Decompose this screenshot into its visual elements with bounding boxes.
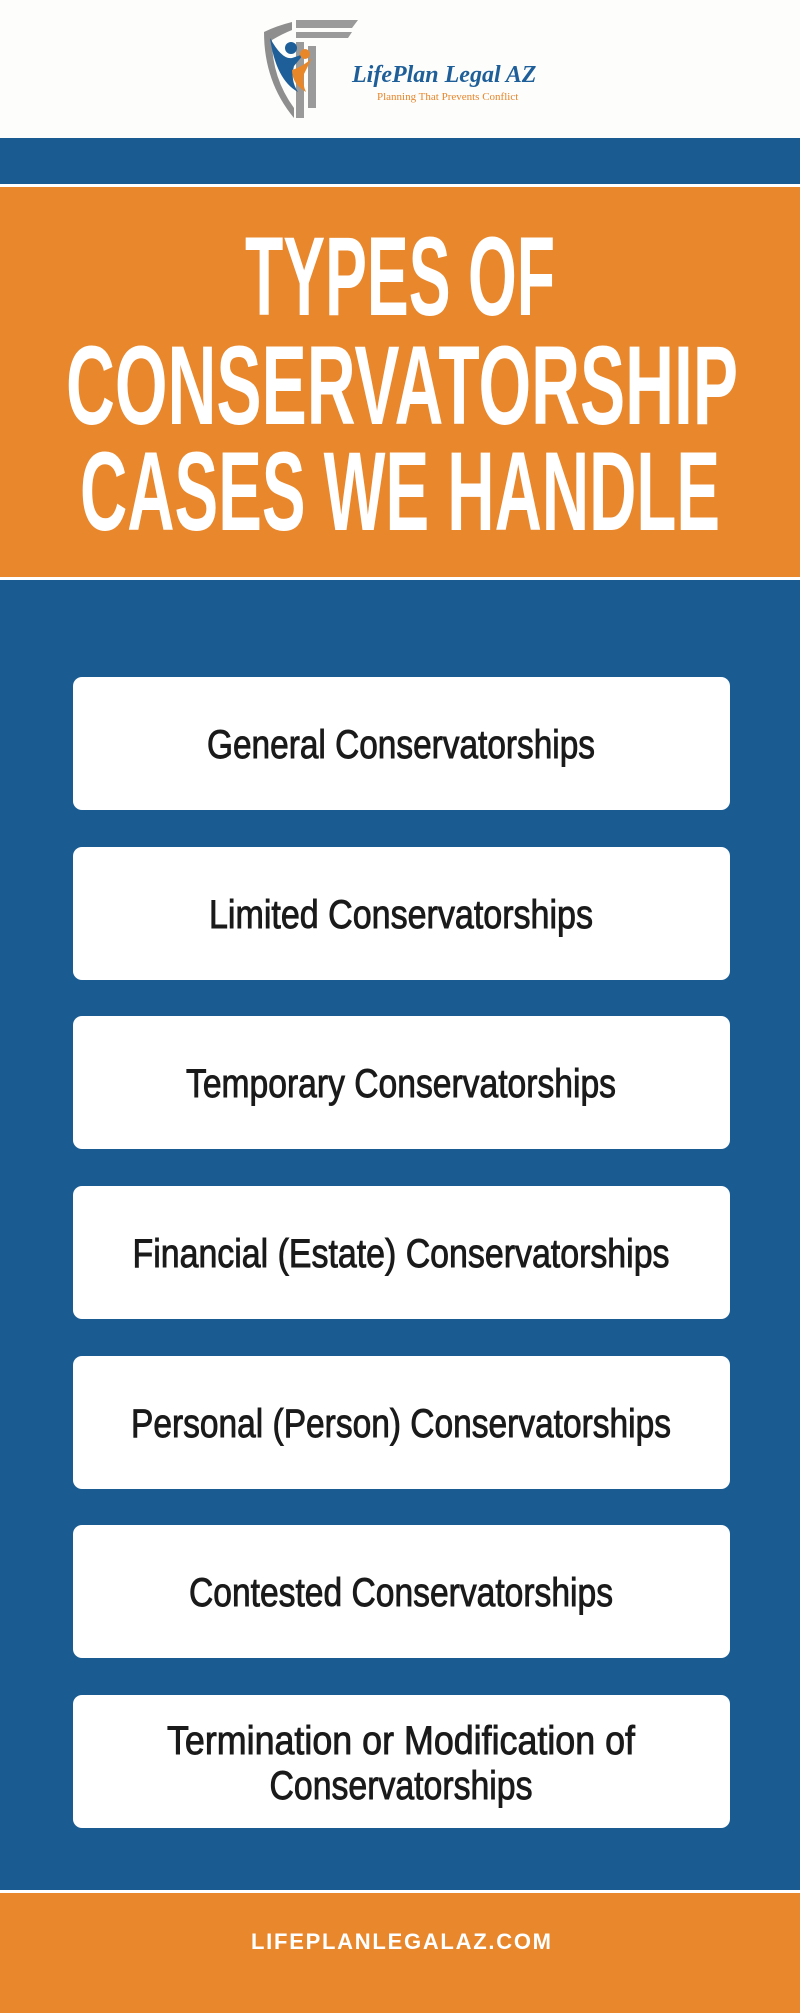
card: general: General Conservatorships [207,723,595,767]
card: termination: Termination or Modification of [167,1719,636,1763]
card: limited [73,847,730,980]
card: temporary: Temporary Conservatorships [186,1062,616,1106]
brand name: LifePlan Legal AZ [352,62,536,88]
card: personal [73,1356,730,1489]
tagline: Planning That Prevents Conflict [377,91,518,103]
title: TYPES OF [245,214,555,339]
card: general [73,677,730,810]
card: limited: Limited Conservatorships [209,893,593,937]
card: contested: Contested Conservatorships [189,1571,613,1615]
card: termination [73,1695,730,1828]
logo [264,20,536,118]
card: temporary [73,1016,730,1149]
header band [0,0,800,138]
icon: shield with pillar [264,20,358,118]
title band [0,187,800,580]
list of cards [73,677,730,1828]
card: termination: Conservatorships [270,1764,532,1808]
card: financial [73,1186,730,1319]
title [66,214,738,554]
footer [0,1893,800,2013]
card: contested [73,1525,730,1658]
footer url: LIFEPLANLEGALAZ.COM [251,1929,551,1954]
